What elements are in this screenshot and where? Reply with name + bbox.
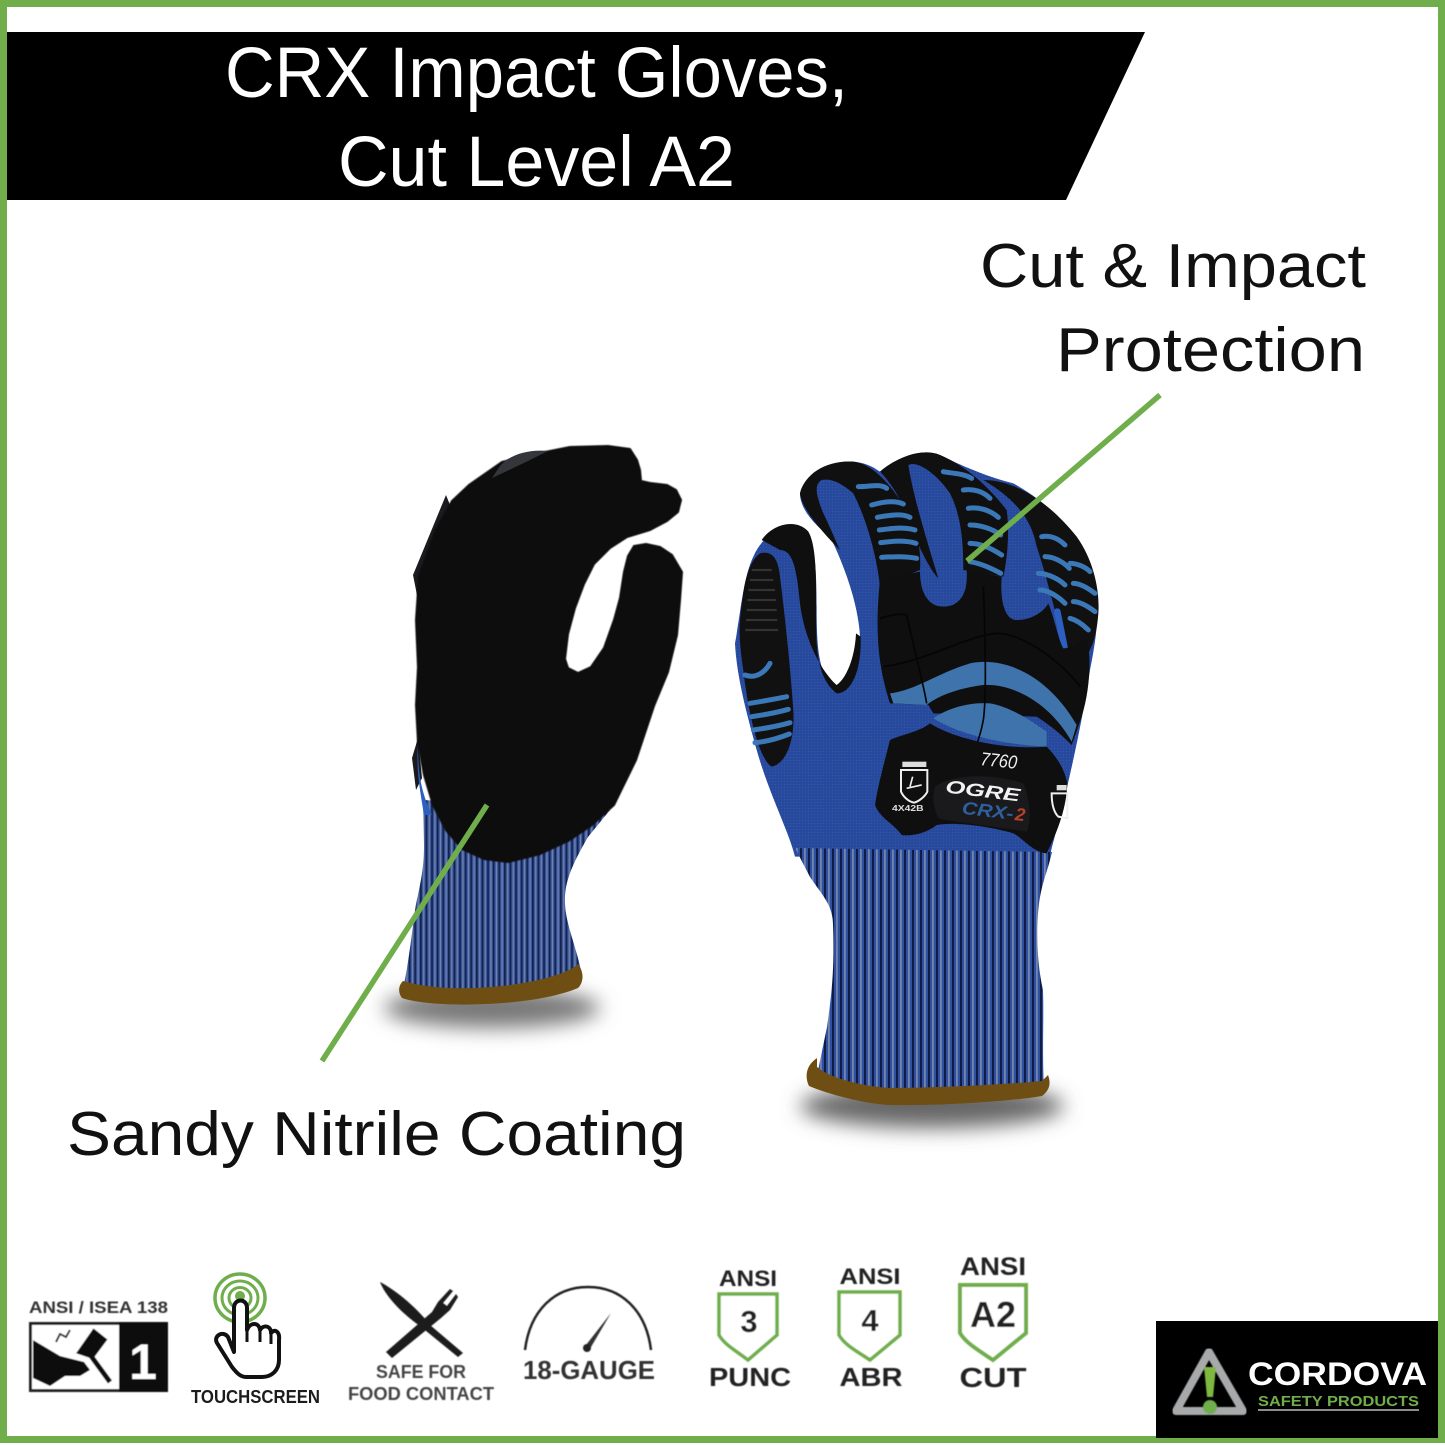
badge: ANSI 4 abrasion: ABR bbox=[840, 1362, 903, 1392]
badge: ANSI 3 puncture: 3 bbox=[740, 1304, 758, 1339]
thumb pad bbox=[740, 553, 794, 767]
badge: ANSI 3 puncture: ANSI bbox=[719, 1266, 777, 1291]
ribbed cuff bbox=[795, 848, 1052, 1097]
callout: cut and impact protection: Protection bbox=[1056, 316, 1365, 385]
icon: 18-gauge: 18-GAUGE bbox=[523, 1355, 655, 1385]
logo: Cordova Safety Products: SAFETY PRODUCTS bbox=[1258, 1393, 1419, 1410]
right glove: back view with impact protection: 4X42B bbox=[892, 804, 924, 813]
title text: CRX Impact Gloves, bbox=[225, 34, 848, 113]
icon: ANSI ISEA 138 impact level bbox=[29, 1298, 168, 1392]
icon: safe for food contact: FOOD CONTACT bbox=[348, 1384, 494, 1404]
callout: cut and impact protection: Cut & Impact bbox=[980, 232, 1366, 301]
brown hem bbox=[807, 1058, 1050, 1105]
badge: ANSI 4 abrasion: 4 bbox=[861, 1303, 879, 1338]
right glove: back view with impact protection: CRX- bbox=[961, 798, 1015, 824]
right glove: back view with impact protection bbox=[735, 452, 1099, 1128]
badge: ANSI 4 abrasion bbox=[839, 1264, 903, 1392]
badge: ANSI A2 cut: A2 bbox=[970, 1294, 1016, 1335]
logo: Cordova Safety Products bbox=[1156, 1321, 1438, 1438]
icon: safe for food contact bbox=[348, 1282, 494, 1404]
model number: 7760 bbox=[980, 748, 1019, 773]
logo triangle icon bbox=[1176, 1352, 1243, 1414]
icon: touchscreen: TOUCHSCREEN bbox=[191, 1387, 320, 1407]
badge: ANSI A2 cut: CUT bbox=[960, 1362, 1026, 1393]
callout: sandy nitrile coating: Sandy Nitrile Coating bbox=[67, 1100, 686, 1169]
left glove: palm view bbox=[384, 446, 682, 1028]
badge: ANSI 3 puncture bbox=[709, 1266, 791, 1392]
badge: ANSI A2 cut bbox=[960, 1253, 1026, 1393]
knit hand body bbox=[735, 452, 1097, 857]
blue shield stripes bbox=[890, 662, 1077, 742]
gap blue bbox=[1057, 612, 1064, 647]
right glove: back view with impact protection: 2 bbox=[1013, 804, 1026, 825]
thumb ridges bbox=[745, 663, 790, 743]
title text: Cut Level A2 bbox=[338, 123, 735, 202]
finger edge shells bbox=[800, 462, 920, 587]
badge: ANSI 3 puncture: PUNC bbox=[709, 1362, 791, 1392]
logo text: OGRE bbox=[944, 776, 1023, 806]
icon: ANSI ISEA 138 impact level: ANSI / ISEA 138 bbox=[29, 1298, 168, 1317]
icon: ANSI ISEA 138 impact level: 1 bbox=[129, 1334, 157, 1390]
icon: touchscreen bbox=[191, 1274, 320, 1407]
title text bbox=[225, 34, 848, 202]
callout: cut and impact protection bbox=[980, 232, 1366, 385]
badge right bbox=[1052, 793, 1067, 818]
badge: ANSI 4 abrasion: ANSI bbox=[840, 1264, 900, 1289]
icon: safe for food contact: SAFE FOR bbox=[376, 1362, 466, 1382]
knuckle impact guard bbox=[878, 570, 1089, 745]
guard seams bbox=[880, 587, 1080, 773]
title banner bbox=[7, 32, 1145, 202]
shield badge left bbox=[901, 770, 927, 803]
palm guard with logo bbox=[875, 723, 1067, 853]
finger ridges bbox=[858, 472, 1095, 630]
badge: ANSI A2 cut: ANSI bbox=[960, 1253, 1026, 1281]
logo: Cordova Safety Products: CORDOVA bbox=[1248, 1356, 1427, 1392]
icon: 18-gauge bbox=[523, 1287, 655, 1385]
pointer line: coating bbox=[322, 805, 487, 1061]
pointer line: protection bbox=[967, 395, 1160, 561]
